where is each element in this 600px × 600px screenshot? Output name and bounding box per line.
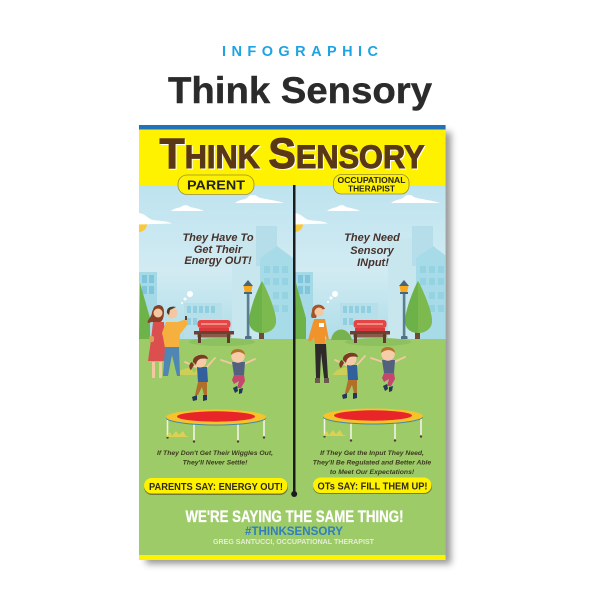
left speech text: They Have To (182, 232, 254, 244)
right park scene (296, 185, 446, 375)
left caption: If They Don't Get Their Wiggles Out, (157, 450, 273, 457)
main title: Think Sensory: Think Sensory (168, 70, 432, 111)
thought bubble (181, 291, 193, 304)
left slogan pill (144, 478, 288, 495)
left speech text: Energy OUT! (184, 255, 252, 267)
father (162, 307, 188, 376)
center divider (291, 185, 297, 497)
poster (131, 125, 451, 560)
parent badge: PARENT (187, 178, 245, 192)
bottom yellow bar (139, 555, 446, 560)
left speech text: Get Their (194, 244, 243, 256)
right caption (313, 450, 431, 476)
parent badge (178, 175, 254, 194)
right speech text (344, 232, 400, 269)
hashtag: #THINKSENSORY (245, 524, 343, 538)
left slogan pill: PARENTS SAY: ENERGY OUT! (149, 481, 283, 493)
left caption: They'll Never Settle! (183, 460, 248, 466)
closing statement: WE'RE SAYING THE SAME THING! (186, 507, 404, 526)
occupational therapist illustration (308, 291, 338, 383)
left jumping children (185, 349, 255, 401)
author credit: GREG SANTUCCI, OCCUPATIONAL THERAPIST (213, 537, 374, 546)
right trampoline (323, 408, 423, 442)
right caption: If They Get the Input They Need, (320, 450, 424, 457)
right speech text: They Need (344, 232, 400, 244)
poster title: THINK SENSORY (160, 130, 424, 178)
right caption: to Meet Our Expectations! (330, 469, 415, 476)
yellow title banner (139, 130, 446, 185)
left speech text (182, 232, 254, 267)
right jumping children (335, 347, 405, 399)
seam cover for lower panel (290, 440, 298, 555)
label: Infographic: INFOGRAPHIC (222, 44, 379, 60)
green shrub by therapist (331, 330, 352, 340)
right speech text: INput! (357, 257, 389, 269)
poster green base (139, 339, 446, 555)
left park scene (139, 185, 293, 375)
parents illustration (148, 291, 193, 378)
right caption: They'll Be Regulated and Better Able (313, 460, 431, 466)
mother (148, 305, 166, 378)
left caption (157, 450, 273, 466)
occupational therapist badge: THERAPIST (348, 184, 395, 194)
top blue bar (139, 125, 446, 130)
poster drop shadow (146, 132, 451, 564)
right slogan pill (313, 478, 432, 494)
occupational therapist badge (334, 174, 409, 194)
thought bubble (327, 291, 338, 303)
right slogan pill: OTs SAY: FILL THEM UP! (318, 480, 428, 492)
occupational therapist badge: OCCUPATIONAL (338, 176, 406, 185)
right speech text: Sensory (350, 245, 395, 257)
left trampoline (166, 410, 266, 443)
